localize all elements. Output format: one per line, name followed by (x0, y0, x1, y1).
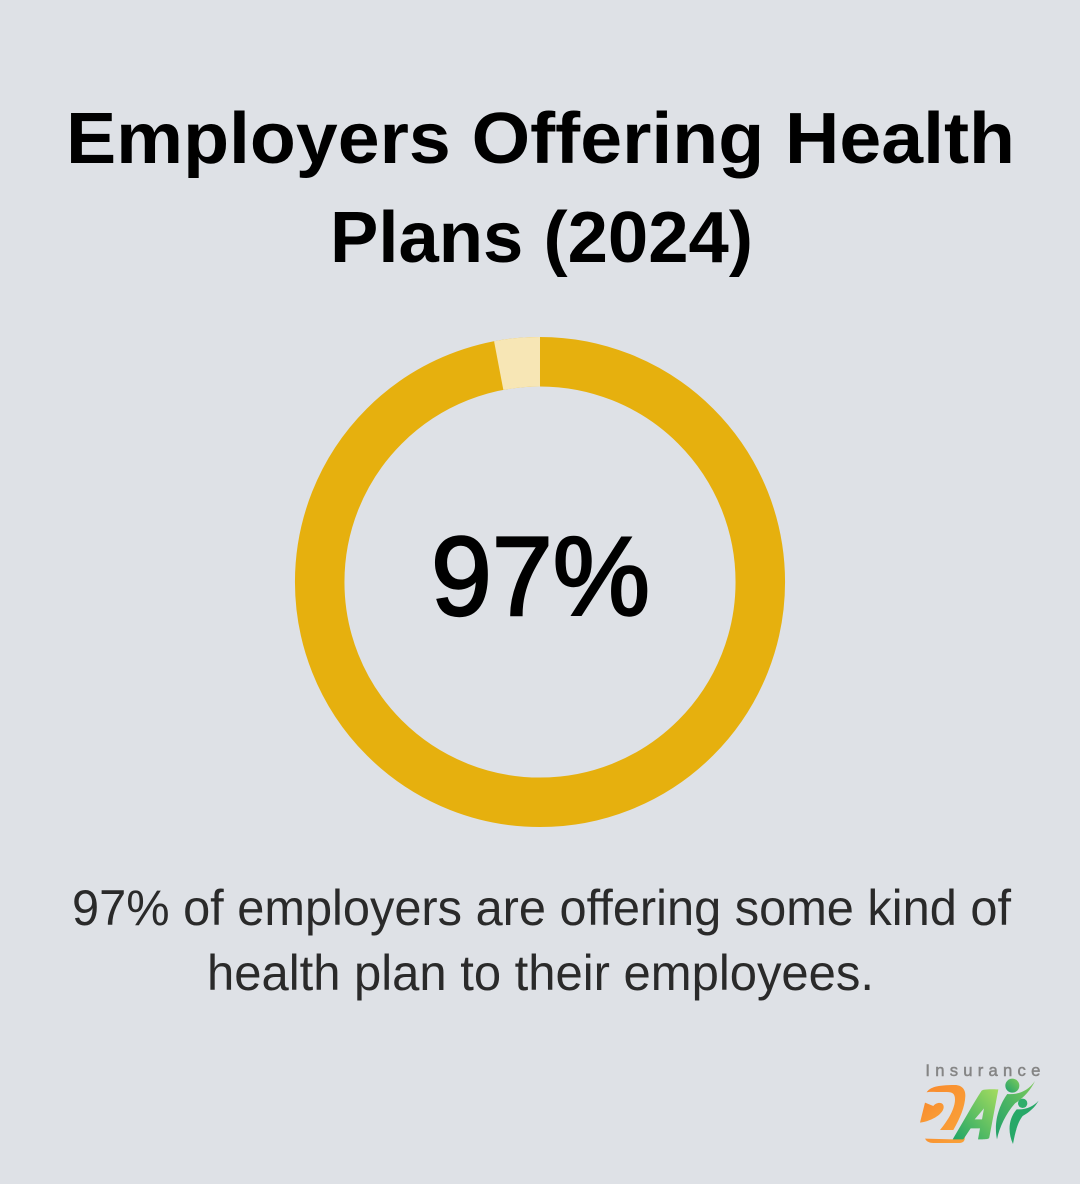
title: Employers Offering Health (66, 99, 1015, 179)
donut chart: 97% (320, 362, 760, 802)
description: health plan to their employees. (207, 945, 874, 1001)
title (66, 99, 1015, 278)
center value: 97% (431, 514, 650, 639)
green A (953, 1089, 998, 1139)
logo: Insurance 2 All (920, 1061, 1040, 1144)
logo: Insurance 2 All: Insurance (925, 1061, 1040, 1080)
orange 2 (927, 1085, 965, 1130)
title: Plans (2024) (330, 198, 753, 278)
figures (1005, 1079, 1019, 1093)
description (72, 880, 1011, 1001)
description: 97% of employers are offering some kind of (72, 880, 1011, 936)
